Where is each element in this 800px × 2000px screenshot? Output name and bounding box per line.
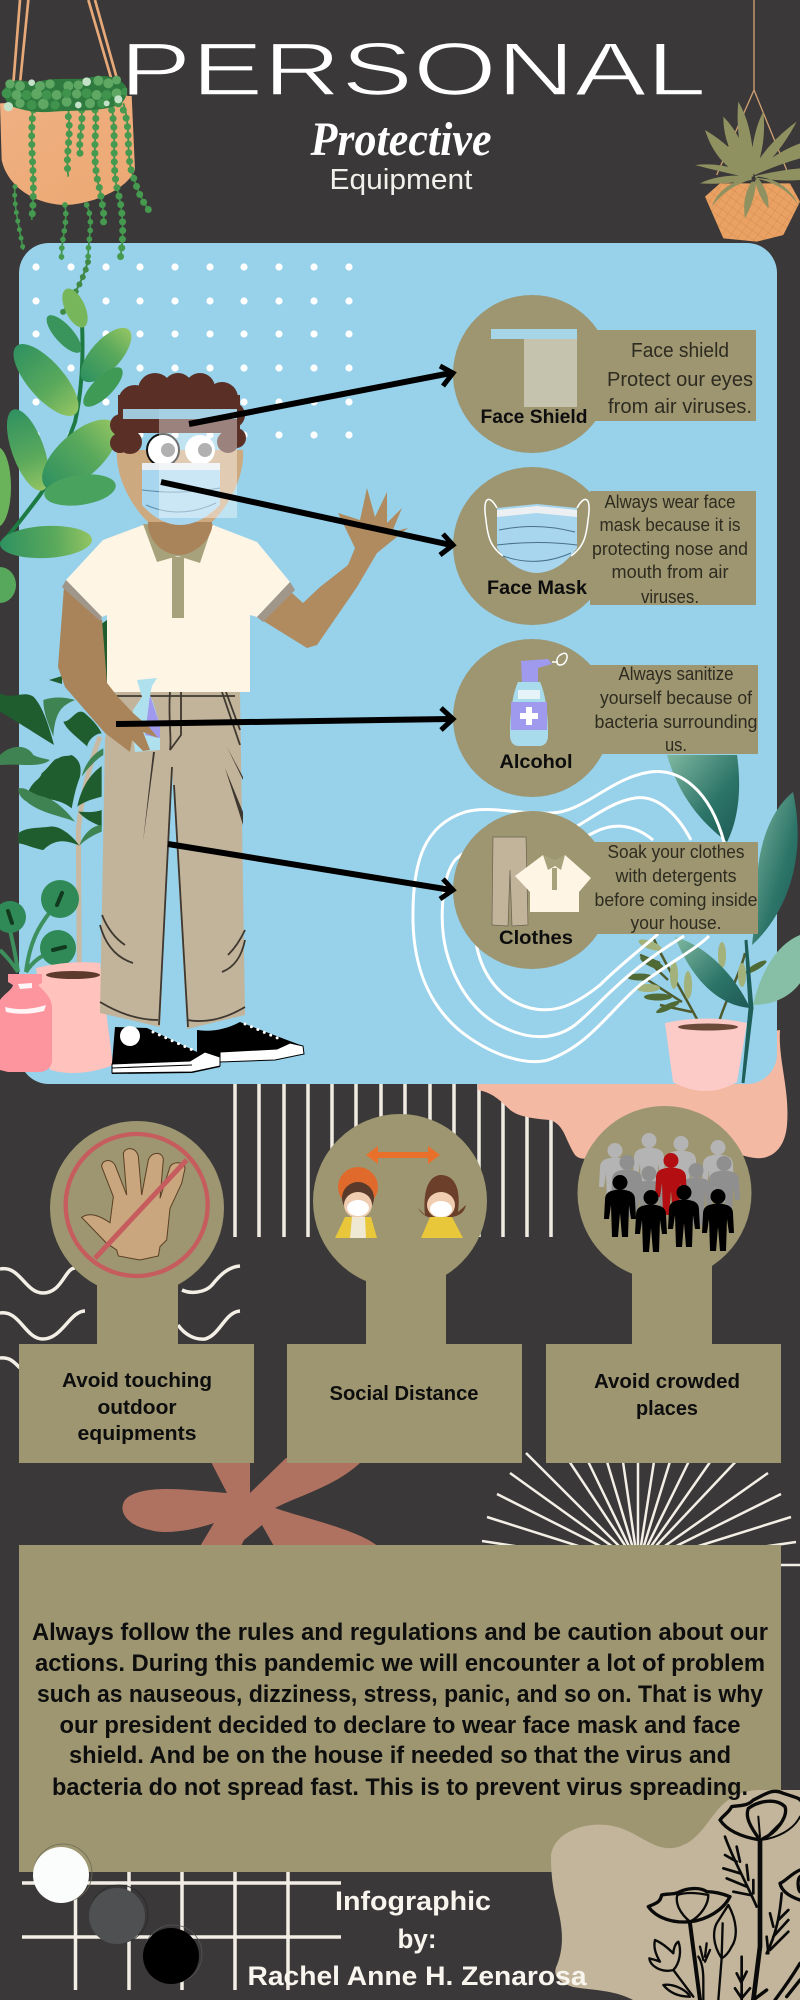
card: avoid crowded <box>546 1106 781 1463</box>
text: face mask description: Always wear face <box>604 492 736 512</box>
footer credit <box>248 1886 588 1991</box>
label <box>594 1371 740 1420</box>
grid lines <box>22 1872 341 1990</box>
summary text <box>32 1619 768 1801</box>
person <box>58 373 408 1074</box>
label: places <box>636 1398 698 1420</box>
fiddle plant left <box>0 620 107 977</box>
label: Social Distance <box>330 1383 478 1405</box>
text: alcohol description: Always sanitize <box>618 664 734 684</box>
icon: two people <box>335 1167 466 1238</box>
icon: mask <box>485 499 589 573</box>
text: face mask description: mask because it is <box>600 515 740 535</box>
summary text: bacteria do not spread fast. This is to prevent virus spreading. <box>52 1774 748 1801</box>
icon: crowd <box>599 1133 740 1252</box>
sleeve shadows <box>62 580 295 622</box>
panel 2: face mask <box>453 467 756 625</box>
shield <box>159 409 237 518</box>
summary text: actions. During this pandemic we will encounter a lot of problem <box>35 1650 765 1677</box>
subtitle: protective: Protective <box>310 113 492 166</box>
text: clothes description <box>594 842 758 933</box>
panel 4: clothes <box>453 811 758 969</box>
icon: face shield <box>491 329 577 407</box>
arrows <box>116 366 453 899</box>
subtitle: equipment: Equipment <box>330 164 472 196</box>
label: clothes: Clothes <box>499 928 573 949</box>
text: face shield description: from air viruses. <box>608 396 752 418</box>
summary panel <box>19 1545 781 1872</box>
shirt <box>66 525 290 692</box>
icon: spray bottle <box>510 653 567 746</box>
trousers <box>100 691 245 1029</box>
leafy branch left <box>0 285 140 603</box>
text: face shield description: Protect our eyes <box>607 369 753 391</box>
label <box>62 1370 212 1445</box>
hair <box>110 373 246 454</box>
label: equipments <box>78 1423 196 1445</box>
panel 1: face shield <box>453 295 756 453</box>
card: social distance <box>287 1114 522 1463</box>
label: Avoid crowded <box>594 1371 740 1393</box>
peach blob <box>478 1030 787 1159</box>
white waves <box>0 1266 240 1368</box>
text: clothes description: before coming inside <box>594 890 758 910</box>
flower shape <box>122 1458 380 1548</box>
blue main panel <box>19 243 777 1084</box>
sneakers <box>112 1022 304 1074</box>
sanitizer in hand <box>132 678 160 752</box>
footer credit: Rachel Anne H. Zenarosa <box>248 1961 588 1991</box>
trailing vine <box>63 260 88 312</box>
text: face mask description: viruses. <box>641 587 699 607</box>
summary text: Always follow the rules and regulations and be caution about our <box>32 1619 768 1646</box>
right arm and hand <box>257 488 408 648</box>
lily plant and pink pots <box>0 880 113 1073</box>
summary text: our president decided to declare to wear face mask and face <box>60 1712 740 1739</box>
icon: no touching hand <box>66 1134 208 1276</box>
contour lines <box>413 772 724 1062</box>
text: face shield description: Face shield <box>631 340 729 362</box>
shirt collar <box>543 855 565 890</box>
face <box>117 450 243 522</box>
collar <box>143 524 213 563</box>
panel 3: alcohol <box>453 639 758 797</box>
teal leaves top right <box>667 755 798 945</box>
text: face mask description: protecting nose and <box>592 539 748 559</box>
dot grid <box>32 263 353 439</box>
icon: shirt <box>515 855 591 912</box>
label: face shield: Face Shield <box>480 407 588 428</box>
text: alcohol description <box>594 664 758 755</box>
hanging plant left <box>0 0 150 260</box>
label: outdoor <box>98 1397 177 1419</box>
footer credit: Infographic <box>335 1886 491 1916</box>
eyes <box>147 434 179 466</box>
summary text: such as nauseous, dizziness, stress, panic, and so on. That is why <box>37 1681 764 1708</box>
burst lines <box>482 1453 800 1565</box>
text: face shield description <box>607 340 753 418</box>
footer credit: by: <box>398 1924 436 1954</box>
text: clothes description: with detergents <box>615 866 736 886</box>
summary text: shield. And be on the house if needed so that the virus and <box>69 1742 731 1769</box>
text: face mask description <box>592 492 748 607</box>
black flowers <box>648 1791 800 2000</box>
left arm and hand <box>58 587 158 752</box>
label: alcohol: Alcohol <box>500 752 572 773</box>
face mask <box>142 464 220 525</box>
potted plant right <box>627 935 800 1091</box>
circles <box>33 1844 202 1984</box>
label: face mask: Face Mask <box>487 578 587 599</box>
neck <box>148 510 212 555</box>
title: PERSONAL <box>120 27 706 111</box>
text: clothes description: your house. <box>630 913 722 933</box>
text: alcohol description: bacteria surrounding <box>594 712 758 732</box>
icon: distance arrow <box>366 1146 440 1164</box>
icon: trousers <box>492 837 528 926</box>
white stripes <box>235 1080 551 1237</box>
text: face mask description: mouth from air <box>612 562 728 582</box>
card: avoid touching <box>19 1121 254 1463</box>
hanging plant right <box>695 0 800 242</box>
text: clothes description: Soak your clothes <box>608 842 744 862</box>
label: Avoid touching <box>62 1370 212 1392</box>
beige blob <box>551 1790 800 2000</box>
text: alcohol description: us. <box>665 735 687 755</box>
text: alcohol description: yourself because of <box>600 688 753 708</box>
